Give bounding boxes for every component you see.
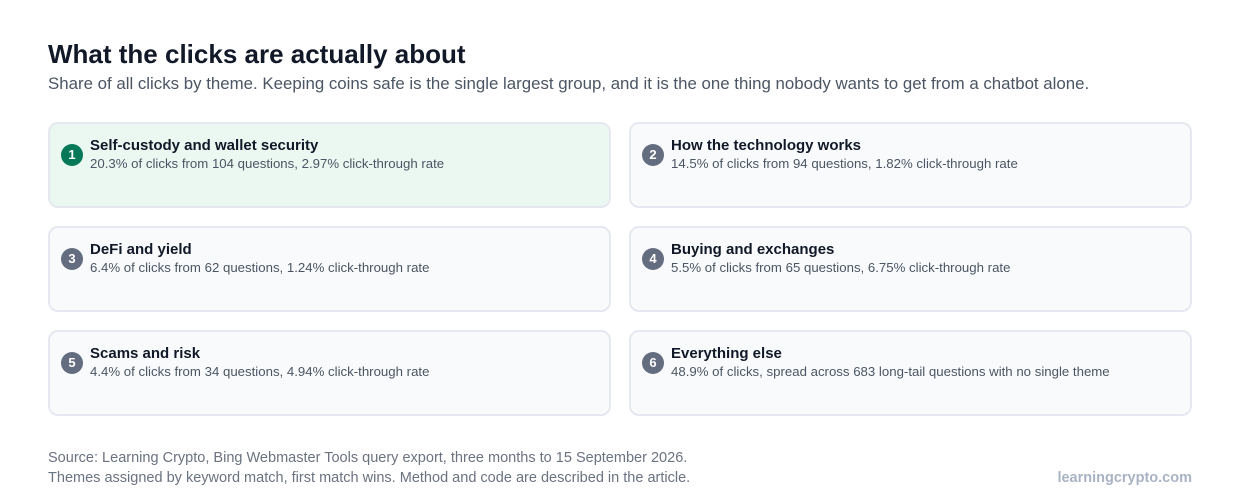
card 5 heading: Scams and risk xyxy=(90,345,200,362)
card 2: technology xyxy=(629,122,1192,208)
subtitle: Share of all clicks by theme. Keeping coins safe is the single largest group, and it is the one thing nobody wants to get from a chatbot alone. xyxy=(48,74,1089,93)
badge 2 xyxy=(642,144,664,166)
badge 3: 3 xyxy=(68,251,76,266)
badge 4: 4 xyxy=(649,251,657,266)
badge 2: 2 xyxy=(649,147,657,162)
brand: learningcrypto.com xyxy=(1057,470,1192,486)
source note: Source: Learning Crypto, Bing Webmaster Tools query export, three months to 15 September 2026. xyxy=(48,450,687,466)
source note xyxy=(48,450,690,486)
badge 1 xyxy=(61,144,83,166)
card 2 heading: How the technology works xyxy=(671,137,861,154)
badge 3 xyxy=(61,248,83,270)
card 3 detail: 6.4% of clicks from 62 questions, 1.24% click-through rate xyxy=(90,260,429,275)
badge 5 xyxy=(61,352,83,374)
source note: Themes assigned by keyword match, first match wins. Method and code are described in the article. xyxy=(48,470,690,486)
title: What the clicks are actually about xyxy=(48,39,466,69)
card 5 detail: 4.4% of clicks from 34 questions, 4.94% click-through rate xyxy=(90,364,429,379)
card 1 heading: Self-custody and wallet security xyxy=(90,137,318,154)
badge 5: 5 xyxy=(68,355,76,370)
badge 6 xyxy=(642,352,664,374)
card 2 detail: 14.5% of clicks from 94 questions, 1.82% click-through rate xyxy=(671,156,1018,171)
badge 6: 6 xyxy=(649,355,657,370)
card 3 heading: DeFi and yield xyxy=(90,241,192,258)
badge 1: 1 xyxy=(68,147,76,162)
card 1: self-custody xyxy=(48,122,611,208)
card 4 detail: 5.5% of clicks from 65 questions, 6.75% click-through rate xyxy=(671,260,1010,275)
card 3: defi xyxy=(48,226,611,312)
badge 4 xyxy=(642,248,664,270)
card 6: everything else xyxy=(629,330,1192,416)
card 4 heading: Buying and exchanges xyxy=(671,241,834,258)
card 6 heading: Everything else xyxy=(671,345,782,362)
card 1 detail: 20.3% of clicks from 104 questions, 2.97% click-through rate xyxy=(90,156,444,171)
card 6 detail: 48.9% of clicks, spread across 683 long-tail questions with no single theme xyxy=(671,364,1110,379)
card 5: scams xyxy=(48,330,611,416)
card 4: buying xyxy=(629,226,1192,312)
